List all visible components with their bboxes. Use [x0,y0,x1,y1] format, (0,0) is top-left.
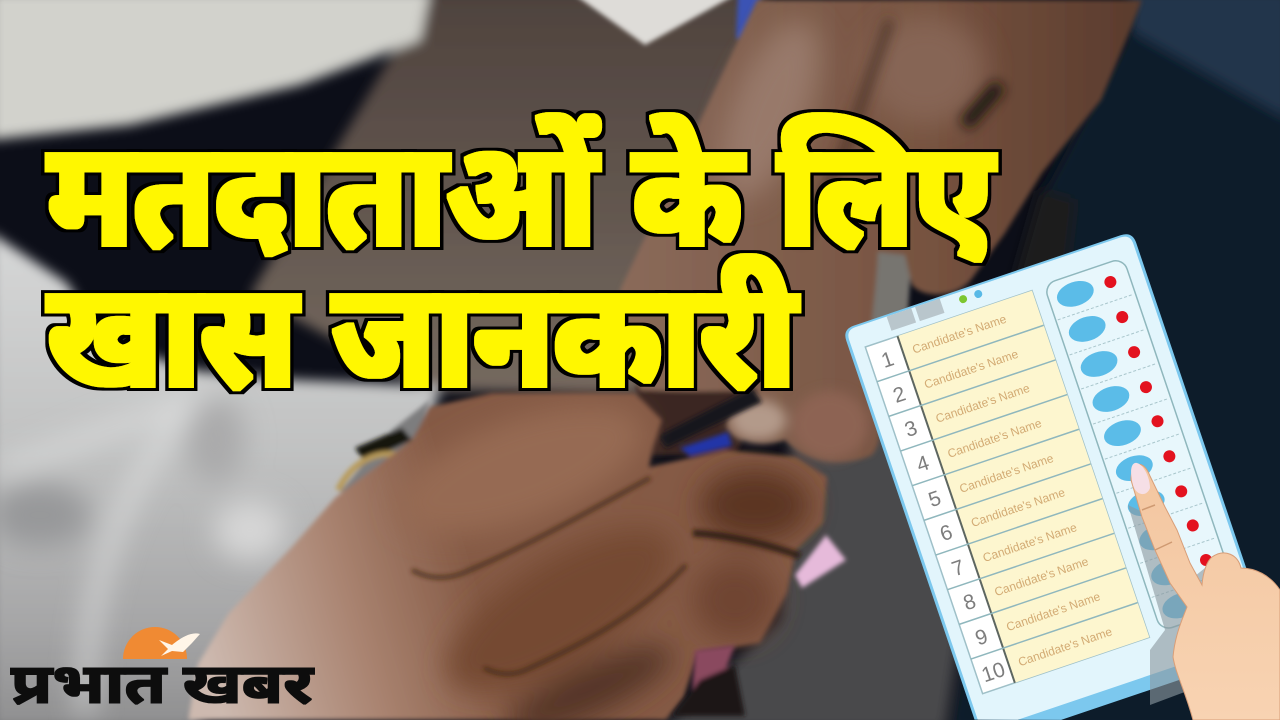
candidate table: 7 [949,556,967,581]
candidate table: 8 [960,590,979,615]
candidate table: Candidate's Name [934,381,1032,426]
watch strap and ring [340,400,430,492]
title: headline in two lines [48,113,995,417]
icon: orange rising sun [123,627,187,659]
white paper on table [575,0,735,45]
lower hand creases [412,478,650,578]
gap between fingers [862,250,912,340]
logo wordmark: प्रभात खबर [11,654,315,716]
candidate table: 2 [890,382,909,408]
pen nib [658,388,762,448]
lower hand shading [381,379,810,720]
candidate table: 4 [914,451,932,477]
candidate table: Candidate's Name [910,312,1008,357]
candidate table: 6 [937,521,956,546]
candidate table: Candidate's Name [969,485,1067,530]
shadow behind the pen [635,385,770,455]
candidate table: Candidate's Name [922,347,1020,392]
headline line 1: मतदाताओं के लिए [48,113,995,276]
candidate table: Candidate's Name [946,416,1044,461]
candidate table: Candidate's Name [1016,624,1114,669]
candidate table: 5 [926,487,944,512]
candidate table: 10 [979,658,1008,687]
candidate table: Candidate's Name [1004,589,1102,634]
candidate table: 1 [878,347,897,373]
candidate table: Candidate's Name [981,520,1079,565]
icon: pointing hand pressing a button [1128,463,1280,720]
candidate table: 3 [902,416,920,442]
headline line 2: खास जानकारी [48,254,799,417]
upper hand [620,0,1142,462]
lower hand [188,393,827,720]
candidate table [865,291,1149,694]
blue pen behind hand [736,0,762,42]
logo: Prabhat Khabar [11,627,315,716]
upper hand shading [699,8,985,212]
candidate table: Candidate's Name [993,554,1091,599]
candidate table: 9 [972,625,991,650]
cloth folds [0,390,286,715]
candidate table: Candidate's Name [958,451,1056,496]
ballot buttons panel [1044,258,1241,631]
icon: white bird [159,633,200,656]
pink paper [795,535,846,588]
illustration: electronic voting machine [842,231,1273,720]
